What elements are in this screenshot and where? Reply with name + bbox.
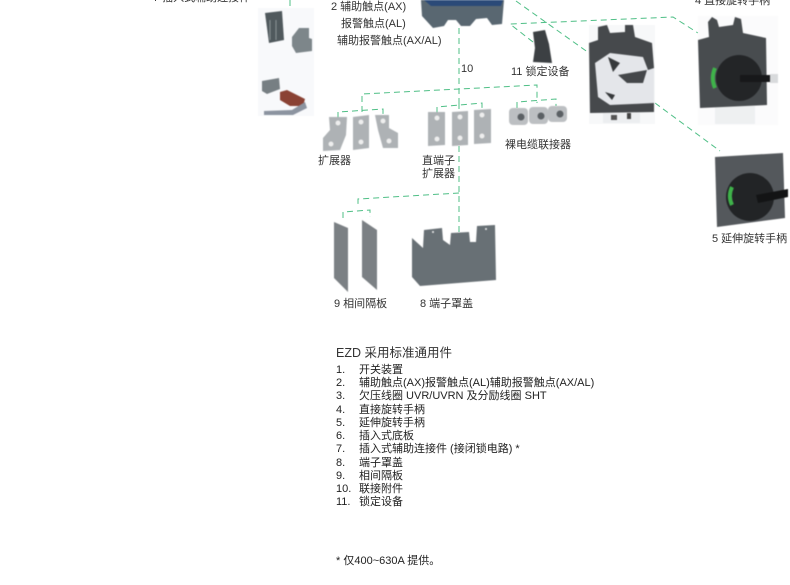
parts list: 相间隔板 <box>359 470 403 482</box>
parts list: 6. <box>336 430 345 442</box>
parts list: 3. <box>336 390 345 402</box>
label: terminal cover: 8 端子罩盖 <box>420 298 473 310</box>
parts list: 5. <box>336 417 345 429</box>
parts list: 端子罩盖 <box>359 457 403 469</box>
label: extended rotary handle: 5 延伸旋转手柄 <box>712 233 787 245</box>
label: locking device: 11 锁定设备 <box>511 66 569 78</box>
parts list: 7. <box>336 443 345 455</box>
label: straight terminal spreaders <box>422 154 455 180</box>
parts list: 锁定设备 <box>359 496 403 508</box>
parts list <box>336 364 594 508</box>
parts list: 4. <box>336 404 345 416</box>
label: interphase barriers: 9 相间隔板 <box>334 298 387 310</box>
label: auxiliary contacts: 报警触点(AL) <box>341 18 406 30</box>
parts list: 直接旋转手柄 <box>359 404 425 416</box>
parts list: 延伸旋转手柄 <box>359 417 425 429</box>
parts list: 2. <box>336 377 345 389</box>
parts list: 插入式底板 <box>359 430 414 442</box>
parts list: 插入式辅助连接件 (接闭锁电路) * <box>359 443 520 455</box>
label: bare cable connectors: 裸电缆联接器 <box>505 139 571 151</box>
parts list: 9. <box>336 470 345 482</box>
parts list: 11. <box>336 496 350 508</box>
label: straight terminal spreaders: 直端子 <box>422 155 455 167</box>
heading: parts list title: EZD 采用标准通用件 <box>336 346 452 360</box>
parts list: 开关装置 <box>359 364 403 376</box>
label: spreaders: 扩展器 <box>318 155 351 167</box>
label: 10: 10 <box>461 63 473 75</box>
footnote: * 仅400~630A 提供。 <box>336 555 440 567</box>
parts list: 欠压线圈 UVR/UVRN 及分励线圈 SHT <box>359 390 547 402</box>
label: auxiliary contacts: 2 辅助触点(AX) <box>331 1 406 13</box>
parts list: 8. <box>336 457 345 469</box>
parts list: 联接附件 <box>359 483 403 495</box>
parts list: 10. <box>336 483 351 495</box>
label: auxiliary contacts: 辅助报警触点(AX/AL) <box>337 35 442 47</box>
parts list: 1. <box>336 364 345 376</box>
label: straight terminal spreaders: 扩展器 <box>422 168 455 180</box>
label: auxiliary contacts <box>331 0 442 47</box>
parts list: 辅助触点(AX)报警触点(AL)辅助报警触点(AX/AL) <box>359 377 594 389</box>
